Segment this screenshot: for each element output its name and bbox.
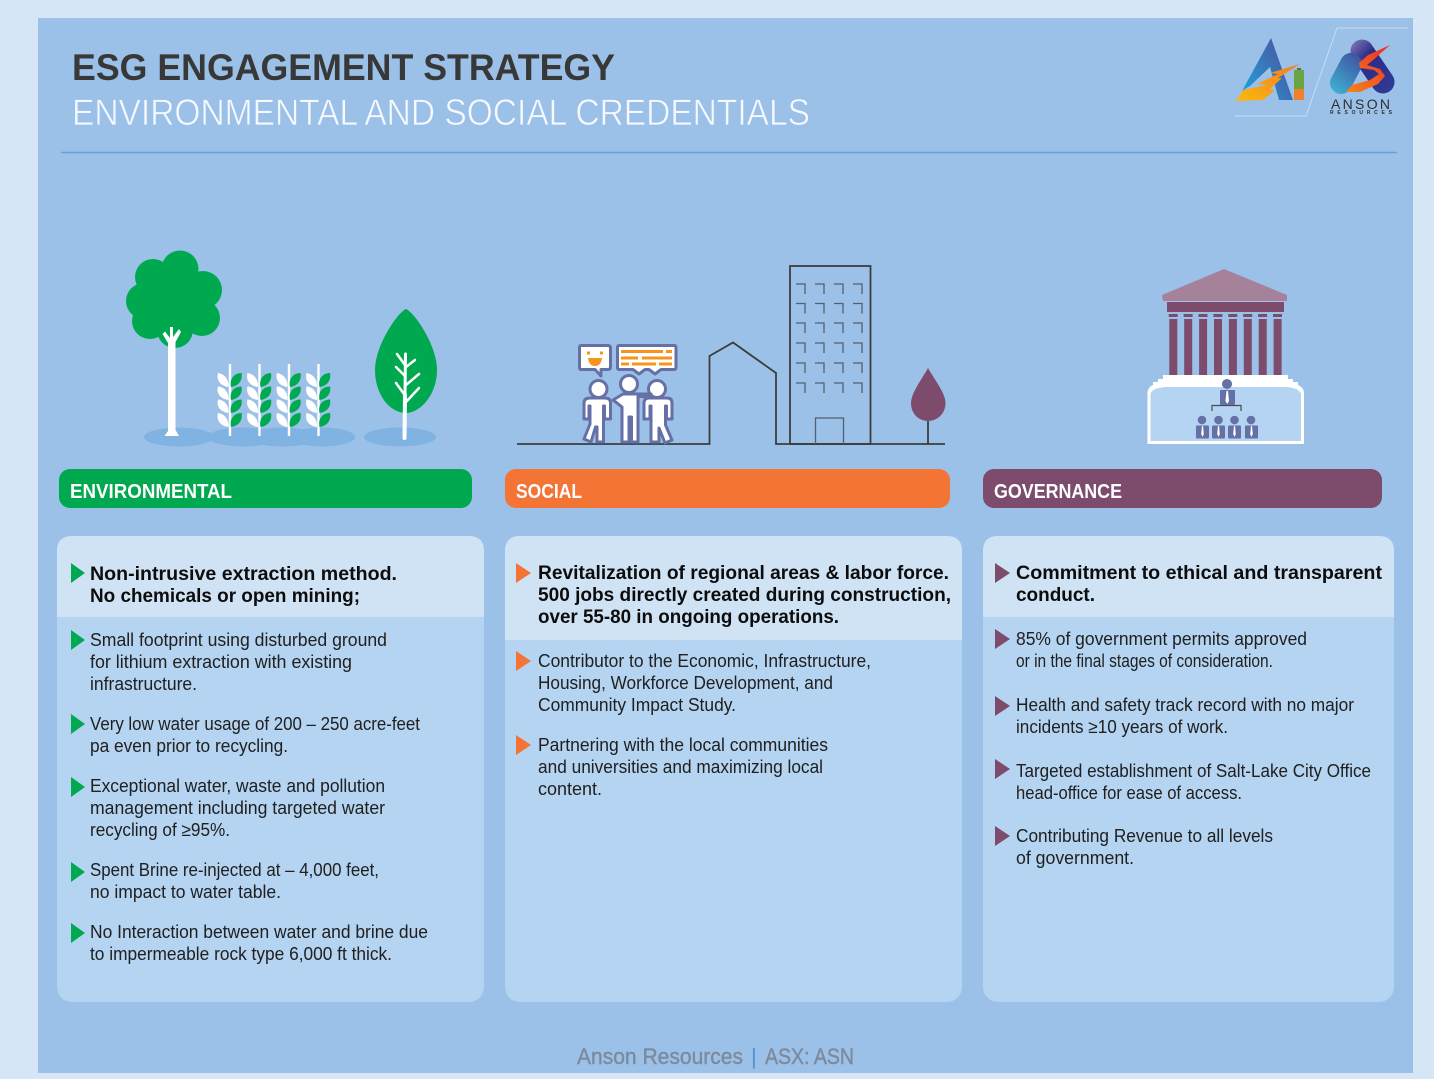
- panel: environmental: [57, 536, 484, 1002]
- bullet: waste management: Exceptional water, waste and pollution: [90, 776, 385, 796]
- bullet: local communities: content.: [538, 779, 602, 799]
- bullet: footprint: Small footprint using disturbed ground: [90, 630, 387, 650]
- bullet: revenue: [995, 826, 1273, 868]
- bullet: waste management: management including targeted water: [90, 798, 385, 818]
- icon: lightning A and battery logo: [1236, 38, 1304, 101]
- bullet: economic study: Housing, Workforce Development, and: [538, 673, 833, 693]
- icon: leaf tree: [375, 309, 437, 438]
- illustration: environmental: [126, 250, 437, 446]
- bullet: permits: or in the final stages of consideration.: [1016, 651, 1273, 671]
- heading bar: environmental: ENVIRONMENTAL: [70, 481, 232, 503]
- icon: classical building: [1162, 269, 1287, 375]
- icon: Anson Resources logo: [1330, 45, 1393, 116]
- bullet: waste management: recycling of ≥95%.: [90, 820, 230, 840]
- icon: people talking: [580, 346, 676, 443]
- panel: governance: [983, 536, 1394, 1002]
- bullet: health and safety: [995, 695, 1354, 737]
- lead bullet: conduct.: [1016, 585, 1095, 606]
- bullet: head office: head-office for ease of access.: [1016, 783, 1242, 803]
- bullet: economic study: Community Impact Study.: [538, 695, 736, 715]
- lead bullet: 500 jobs directly created during construction,: [538, 585, 951, 606]
- bullet: no interaction: No Interaction between water and brine due: [90, 922, 428, 942]
- bullet: footprint: infrastructure.: [90, 674, 197, 694]
- skyline line art: [517, 266, 945, 444]
- illustration: social: [517, 266, 946, 444]
- lead bullet: [995, 563, 1383, 606]
- footer: [577, 1044, 854, 1069]
- bullet: revenue: of government.: [1016, 848, 1134, 868]
- lead bullet: No chemicals or open mining;: [90, 586, 360, 607]
- bullet: economic study: [516, 651, 871, 715]
- bullet: water usage: Very low water usage of 200 – 250 acre-feet: [90, 714, 420, 734]
- bullet: economic study: Contributor to the Economic, Infrastructure,: [538, 651, 871, 671]
- lead bullet: over 55-80 in ongoing operations.: [538, 607, 839, 628]
- icon: large tree: [126, 250, 222, 436]
- bullet: waste management: [71, 776, 385, 840]
- icon: tree: [911, 368, 946, 421]
- lead bullet: [516, 563, 951, 628]
- icon: Anson Resources logo: ANSON: [1331, 96, 1390, 112]
- bullet: health and safety: Health and safety track record with no major: [1016, 695, 1354, 715]
- ground shadows: [144, 428, 436, 446]
- bullet: footprint: for lithium extraction with existing: [90, 652, 352, 672]
- bullet: footprint: [71, 630, 387, 694]
- bullet: spent brine: Spent Brine re-injected at – 4,000 feet,: [90, 860, 379, 880]
- illustration: governance: [1148, 269, 1304, 444]
- lead bullet: Non-intrusive extraction method.: [90, 564, 397, 585]
- lead bullet: [71, 563, 397, 607]
- title: ENVIRONMENTAL AND SOCIAL CREDENTIALS: [72, 92, 810, 133]
- bullet: permits: 85% of government permits approved: [1016, 629, 1307, 649]
- icon: wheat row: [218, 364, 330, 436]
- title: ESG ENGAGEMENT STRATEGY: [72, 47, 615, 88]
- lead bullet: Commitment to ethical and transparent: [1016, 563, 1383, 584]
- bullet: local communities: [516, 735, 828, 799]
- icon: Anson Resources logo: RESOURCES: [1330, 110, 1393, 116]
- icon: book base: [1148, 375, 1304, 444]
- logos: [1235, 28, 1408, 116]
- lead bullet: Revitalization of regional areas & labor force.: [538, 563, 949, 584]
- footer: Anson Resources: [577, 1044, 743, 1069]
- bullet: local communities: Partnering with the local communities: [538, 735, 828, 755]
- bullet: no interaction: to impermeable rock type 6,000 ft thick.: [90, 944, 392, 964]
- footer: |: [751, 1044, 757, 1069]
- heading bar: governance: [983, 469, 1382, 508]
- title: [72, 47, 810, 133]
- heading bar: social: SOCIAL: [516, 481, 582, 503]
- heading bar: social: [505, 469, 950, 508]
- bullet: health and safety: incidents ≥10 years of work.: [1016, 717, 1228, 737]
- bullet: water usage: [71, 714, 420, 756]
- footer: ASX: ASN: [765, 1044, 854, 1069]
- bullet: spent brine: [71, 860, 379, 902]
- icon: organisation chart: [1196, 379, 1258, 438]
- bullet: revenue: Contributing Revenue to all levels: [1016, 826, 1273, 846]
- heading bar: governance: GOVERNANCE: [994, 481, 1122, 503]
- bullet: spent brine: no impact to water table.: [90, 882, 281, 902]
- bullet: permits: [995, 629, 1307, 671]
- bullet: water usage: pa even prior to recycling.: [90, 736, 288, 756]
- panel: social: [505, 536, 962, 1002]
- heading bar: environmental: [59, 469, 472, 508]
- bullet: local communities: and universities and maximizing local: [538, 757, 823, 777]
- bullet: head office: Targeted establishment of Salt-Lake City Office: [1016, 761, 1371, 781]
- bullet: head office: [995, 759, 1371, 803]
- bullet: no interaction: [71, 922, 428, 964]
